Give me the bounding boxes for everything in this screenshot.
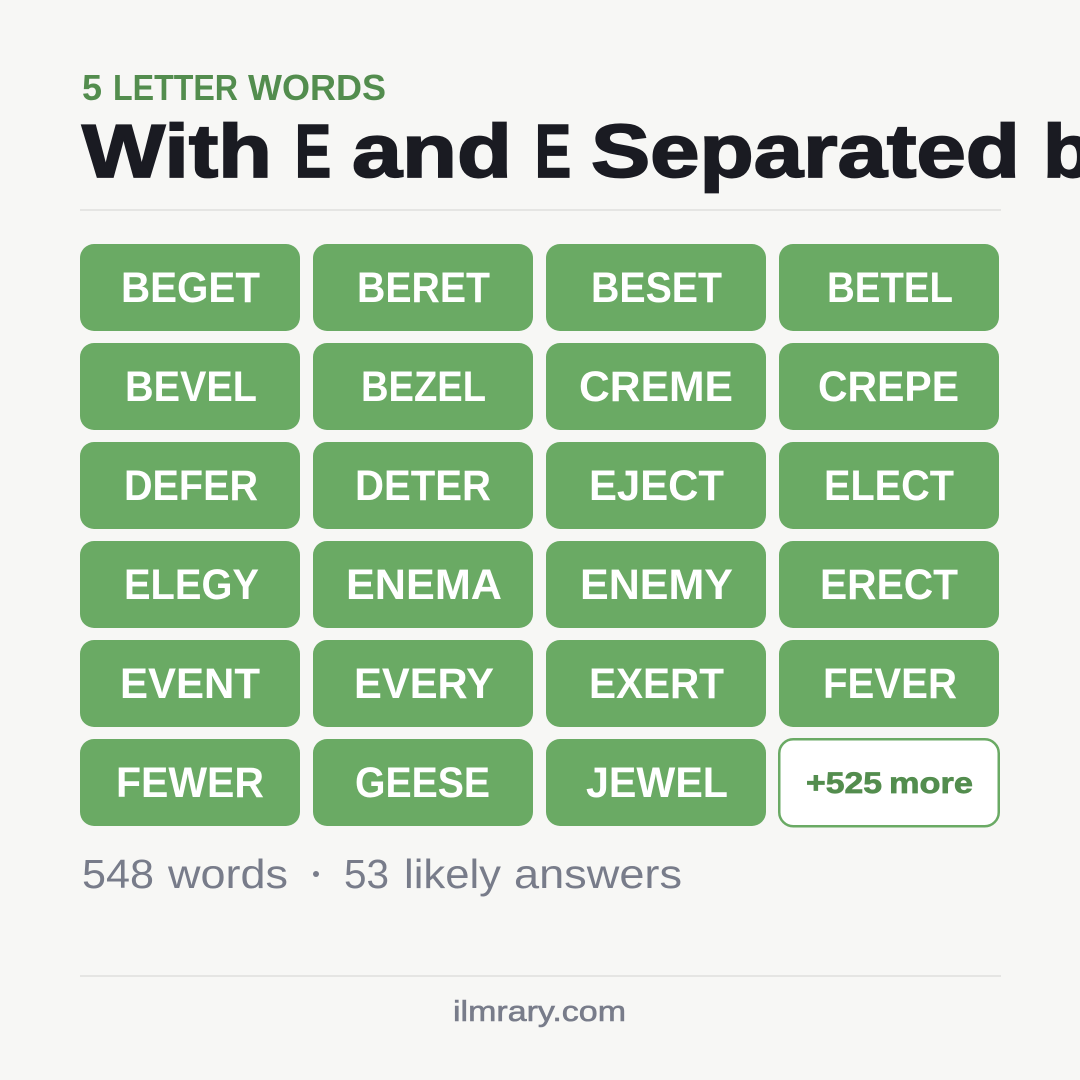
word tile: BESET: BESET <box>591 264 722 312</box>
stats line: words <box>167 851 288 897</box>
stats line: answers <box>514 851 682 897</box>
word tile: ERECT <box>779 541 999 628</box>
stats line <box>82 851 682 897</box>
eyebrow heading: 5 <box>82 67 102 108</box>
footer site name: ilmrary.com <box>453 996 626 1028</box>
word tile: ELEGY <box>80 541 300 628</box>
word tile: DETER <box>313 442 533 529</box>
eyebrow heading <box>82 67 386 108</box>
word tile: DEFER <box>80 442 300 529</box>
word tile: GEESE: GEESE <box>355 759 490 807</box>
word tile: EXERT <box>546 640 766 727</box>
stats line: 53 <box>344 851 389 897</box>
title: E <box>535 109 571 193</box>
word grid <box>80 244 999 826</box>
eyebrow heading: LETTER <box>113 67 238 108</box>
word tile: ERECT: ERECT <box>820 561 958 609</box>
title <box>82 109 1080 193</box>
word tile: FEWER: FEWER <box>116 759 264 807</box>
word tile: BEZEL: BEZEL <box>361 363 486 411</box>
word tile: BERET: BERET <box>357 264 490 312</box>
more tile: +525 more: +525 <box>806 767 882 800</box>
word tile: FEWER <box>80 739 300 826</box>
stats line: 548 <box>82 851 154 897</box>
word tile: ENEMY: ENEMY <box>580 561 733 609</box>
word tile: DEFER: DEFER <box>124 462 258 510</box>
word tile: ENEMA: ENEMA <box>346 561 502 609</box>
word tile: JEWEL <box>546 739 766 826</box>
word tile: ELECT <box>779 442 999 529</box>
word tile: CREPE <box>779 343 999 430</box>
word tile: BEVEL: BEVEL <box>125 363 257 411</box>
word tile: FEVER <box>779 640 999 727</box>
word tile: CREME <box>546 343 766 430</box>
word tile: CREPE: CREPE <box>818 363 959 411</box>
word tile: EVERY <box>313 640 533 727</box>
word tile: BETEL: BETEL <box>827 264 953 312</box>
word tile: EVERY: EVERY <box>354 660 494 708</box>
word tile: ENEMY <box>546 541 766 628</box>
word tile: BEVEL <box>80 343 300 430</box>
title: E <box>295 109 331 193</box>
word tile: ENEMA <box>313 541 533 628</box>
more tile: +525 more: more <box>889 767 973 800</box>
stats line: likely <box>404 851 502 897</box>
word tile: BERET <box>313 244 533 331</box>
word tile: ELECT: ELECT <box>824 462 954 510</box>
word tile: CREME: CREME <box>579 363 733 411</box>
word tile: EVENT <box>80 640 300 727</box>
word tile: FEVER: FEVER <box>823 660 957 708</box>
word tile: JEWEL: JEWEL <box>586 759 728 807</box>
word tile: ELEGY: ELEGY <box>124 561 259 609</box>
word tile: EXERT: EXERT <box>589 660 724 708</box>
word tile: DETER: DETER <box>355 462 491 510</box>
word tile: BEZEL <box>313 343 533 430</box>
word tile: GEESE <box>313 739 533 826</box>
word tile: EJECT: EJECT <box>589 462 724 510</box>
word tile: BEGET <box>80 244 300 331</box>
eyebrow heading: WORDS <box>248 67 386 108</box>
word tile: BEGET: BEGET <box>121 264 260 312</box>
title: and <box>352 109 512 193</box>
title: Separated <box>591 109 1020 193</box>
title: With <box>82 109 272 193</box>
word tile: BETEL <box>779 244 999 331</box>
more tile: +525 more <box>779 739 999 826</box>
word tile: BESET <box>546 244 766 331</box>
word tile: EJECT <box>546 442 766 529</box>
word tile: EVENT: EVENT <box>120 660 260 708</box>
